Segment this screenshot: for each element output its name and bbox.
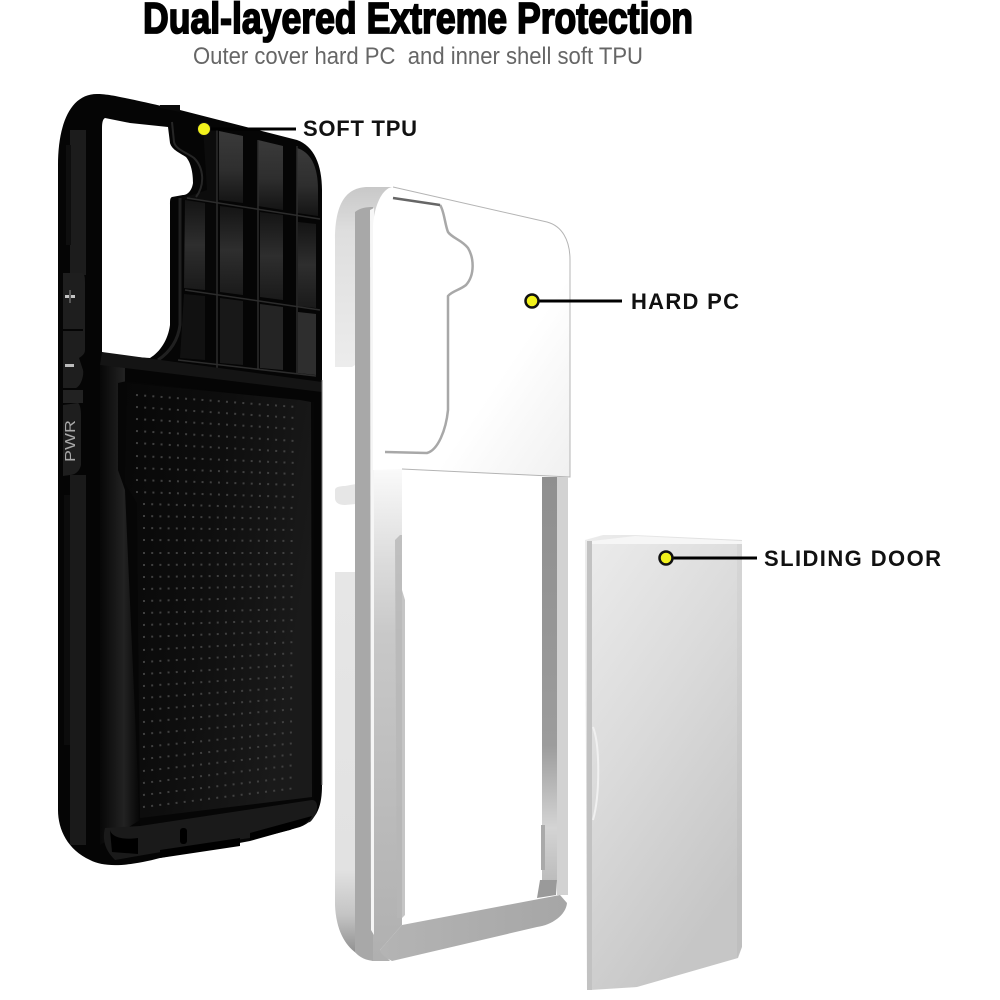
- flange tab: [335, 484, 356, 505]
- camera window: [377, 198, 473, 453]
- side wall band: [355, 207, 376, 961]
- power button: [62, 403, 81, 476]
- finger notch: [593, 727, 598, 820]
- recessed card panel: [118, 381, 314, 826]
- callout: soft TPU: SOFT TPU: [303, 116, 417, 141]
- camera window rim: [385, 205, 473, 453]
- column 3 upper: [258, 140, 283, 210]
- top inner lip: [160, 105, 180, 112]
- door top strip: [592, 536, 742, 544]
- panel: black soft TPU inner shell: [58, 94, 322, 865]
- column 2 upper: [219, 131, 243, 203]
- dot texture: [136, 395, 296, 807]
- right rail: [542, 477, 557, 890]
- column 4 upper: [297, 148, 318, 216]
- callout: hard PC: [526, 289, 739, 314]
- bottom bar: [380, 895, 567, 961]
- upper left flange: [335, 187, 392, 367]
- bottom lip and port: [104, 800, 317, 860]
- case body: [58, 94, 322, 865]
- lower left flange: [335, 572, 356, 953]
- white highlight streak: [370, 208, 374, 935]
- horizontal rib highlights: [178, 130, 320, 376]
- subtitle: Outer cover hard PC and inner shell soft TPU: [193, 43, 643, 70]
- power button: PWR: [62, 420, 79, 462]
- callout: sliding door: [660, 546, 941, 571]
- row 2 panels: [184, 200, 205, 290]
- row 3 panels: [180, 294, 205, 360]
- top grid of ribbed panels: [158, 105, 320, 376]
- inner rail step: [395, 535, 405, 918]
- door right edge: [737, 544, 742, 958]
- notch between buttons: [63, 390, 83, 403]
- volume button: [63, 273, 85, 388]
- door left edge: [587, 541, 592, 990]
- lower body shading: [100, 362, 140, 845]
- camera cutout wall: [172, 122, 202, 197]
- back plate edge: [393, 187, 570, 477]
- panel: hard PC outer shell: [335, 187, 570, 961]
- camera window top shadow: [393, 198, 440, 205]
- column 1 top cell: [183, 127, 217, 202]
- back plate: [373, 187, 570, 477]
- callout: sliding door: SLIDING DOOR: [764, 546, 941, 571]
- callout: soft TPU: [198, 116, 417, 141]
- right edge highlight: [321, 380, 323, 785]
- panel: sliding door: [585, 535, 742, 990]
- inner rail left: [373, 460, 402, 961]
- callout: hard PC: HARD PC: [631, 289, 739, 314]
- left side wall: [70, 130, 86, 275]
